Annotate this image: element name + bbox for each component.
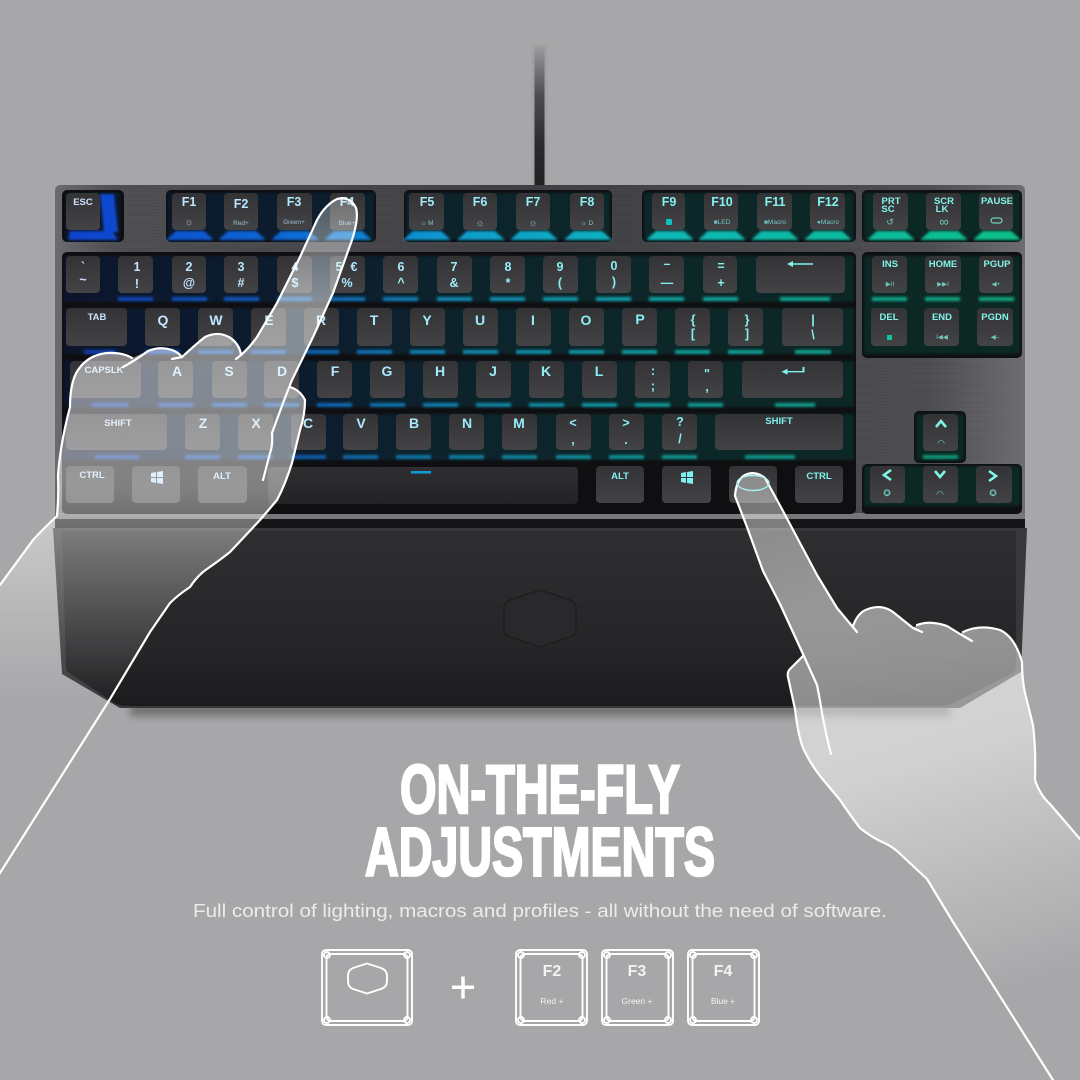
shift key row: . <box>624 433 628 447</box>
QWERTY key row: O <box>581 312 592 328</box>
function key row: SC <box>881 204 895 215</box>
QWERTY key row: ◀– <box>991 334 1000 341</box>
keycap icon: F4: Blue + <box>711 996 735 1006</box>
bottom key row: CTRL <box>79 470 105 481</box>
shift key row: SHIFT <box>765 416 793 427</box>
home key row: G <box>382 363 393 379</box>
keycap icon: F3: Green + <box>622 996 653 1006</box>
number key row: ^ <box>397 276 405 290</box>
key wells <box>62 190 1022 514</box>
QWERTY key row: PGDN <box>981 312 1009 323</box>
keycap icon: F2: Red + <box>541 996 563 1006</box>
number key row: HOME <box>929 259 957 270</box>
home key row: , <box>705 380 709 394</box>
function key row: LK <box>936 204 948 215</box>
QWERTY key row: I <box>531 312 535 328</box>
QWERTY key row: ] <box>745 327 749 341</box>
keycap icon: Cooler Master logo key <box>322 950 412 1025</box>
shift key row: B <box>409 415 419 431</box>
number key row: 3 <box>238 260 245 274</box>
number key row: 4 <box>292 260 299 274</box>
number key row: 8 <box>505 260 512 274</box>
number key row: ( <box>558 276 563 290</box>
shift key row: Z <box>199 415 208 431</box>
home key row: F <box>331 363 340 379</box>
function key row: ☼ <box>528 218 538 229</box>
shift key row: ◠ <box>937 438 945 448</box>
keycap icon: F3: F3 <box>628 963 646 980</box>
keyboard cable <box>532 45 547 187</box>
number key row: 6 <box>398 260 405 274</box>
number key row: ~ <box>79 273 87 287</box>
wrist rest <box>53 528 1027 716</box>
keycap icon: F3 <box>602 950 673 1025</box>
function key row: F6 <box>473 195 487 209</box>
number key row: = <box>717 259 725 273</box>
shift key row: , <box>571 433 575 447</box>
shift key row: M <box>513 415 525 431</box>
keycap icon: F4: F4 <box>714 963 732 980</box>
function key row: SCR <box>934 196 954 207</box>
function key row: ■LED <box>714 219 731 226</box>
number key row: 7 <box>451 260 458 274</box>
right hand outline <box>735 473 1080 1080</box>
number key row: ) <box>612 275 616 289</box>
function key row: ESC <box>73 197 93 208</box>
QWERTY key row: U <box>475 312 485 328</box>
function key row: ●Macro <box>817 219 839 226</box>
title: ADJUSTMENTS <box>365 814 715 890</box>
number key row: * <box>506 276 511 290</box>
number key row: 9 <box>557 260 564 274</box>
keycap icon: F2 <box>516 950 587 1025</box>
number key row: ◀+ <box>992 281 1001 288</box>
function key row: F8 <box>580 195 594 209</box>
home key row: J <box>489 363 497 379</box>
home key row: " <box>704 367 710 381</box>
subtitle: Full control of lighting, macros and profiles - all without the need of software. <box>193 900 887 921</box>
number key row: — <box>661 276 674 290</box>
QWERTY key row: I◀◀ <box>936 334 949 341</box>
QWERTY key row: END <box>932 312 952 323</box>
function key row: F2 <box>234 197 248 211</box>
home key row: A <box>172 363 182 379</box>
number key row: @ <box>183 276 195 290</box>
keycap icon: F2: F2 <box>543 963 561 980</box>
QWERTY key row: Y <box>422 312 432 328</box>
number key row: ` <box>81 260 85 274</box>
bottom key row: ALT <box>213 471 231 482</box>
bottom key row: ✪ <box>989 488 997 498</box>
function key row: Red+ <box>233 220 249 227</box>
bottom key row: ◠ <box>936 489 944 499</box>
keycap icon: F4 <box>688 950 759 1025</box>
function key row: Blue+ <box>339 220 356 227</box>
function key row: PRT <box>882 196 901 207</box>
bottom key row: ✪ <box>883 488 891 498</box>
plus sign <box>452 976 474 998</box>
number key row: PGUP <box>984 259 1011 270</box>
function key row: ■Macro <box>764 219 786 226</box>
home key row: K <box>541 363 551 379</box>
right hand translucent fill <box>735 473 1080 1080</box>
number key row: ! <box>135 277 139 291</box>
shift key row: N <box>462 415 472 431</box>
home key row: S <box>224 363 234 379</box>
shift key row: X <box>251 415 261 431</box>
QWERTY key row: [ <box>691 327 696 341</box>
shift key row: > <box>622 416 630 430</box>
number key row: ▶▶I <box>937 281 949 288</box>
number key row: 1 <box>134 260 141 274</box>
bottom key row <box>66 466 1012 504</box>
number key row: & <box>449 276 459 290</box>
QWERTY key row: Q <box>158 312 169 328</box>
number key row <box>66 256 1013 293</box>
home key row: : <box>651 364 655 378</box>
function key row: F3 <box>287 195 301 209</box>
shift key row: / <box>678 432 682 446</box>
shift key row: SHIFT <box>104 418 132 429</box>
QWERTY key row: DEL <box>880 312 899 323</box>
left hand outline <box>0 198 357 873</box>
number key row: 5 <box>336 260 343 274</box>
number key row: # <box>238 276 245 290</box>
function key row: F10 <box>711 195 733 209</box>
fingertip press highlight <box>737 476 769 490</box>
QWERTY key row: R <box>316 312 326 328</box>
function key row: F5 <box>420 195 434 209</box>
number key row: ▶II <box>886 281 894 288</box>
QWERTY key row: P <box>635 311 645 327</box>
title: ON-THE-FLY <box>400 751 680 828</box>
QWERTY key row: | <box>811 313 815 327</box>
number key row: € <box>351 260 358 274</box>
QWERTY key row: \ <box>811 328 815 342</box>
home key row: D <box>277 363 287 379</box>
function key row: F7 <box>526 195 540 209</box>
function key row: ↺ <box>886 217 894 227</box>
function key row: ☼ <box>475 218 485 229</box>
function key row: F4 <box>340 195 354 209</box>
key backlight glow <box>64 193 1021 506</box>
function key row: F1 <box>182 195 196 209</box>
function key row: ∞ <box>939 214 949 229</box>
function key row: ☼ M <box>420 220 434 227</box>
number key row: 2 <box>186 260 193 274</box>
logo emboss on wrist rest <box>504 590 576 647</box>
bottom key row: ALT <box>611 471 629 482</box>
function key row: PAUSE <box>981 196 1013 207</box>
number key row: + <box>717 276 725 290</box>
shift key row: < <box>569 416 577 430</box>
home key row: H <box>435 363 445 379</box>
bottom key row: CTRL <box>806 471 832 482</box>
keyboard body <box>55 185 1025 528</box>
function key row: ☼ D <box>581 220 594 227</box>
shift key row: V <box>356 415 366 431</box>
function key row <box>66 193 1013 230</box>
function key row: Green+ <box>283 219 305 226</box>
shift key row <box>66 414 958 451</box>
home key row: ; <box>651 379 655 393</box>
function key row: ☼ <box>184 217 194 228</box>
QWERTY key row: { <box>691 313 696 327</box>
QWERTY key row: E <box>264 312 274 328</box>
number key row: % <box>341 276 353 290</box>
home key row: L <box>595 363 604 379</box>
QWERTY key row: W <box>209 312 223 328</box>
function key row: F12 <box>817 195 839 209</box>
left hand translucent fill <box>0 198 357 873</box>
number key row: INS <box>882 259 898 270</box>
function key row: F11 <box>765 195 785 209</box>
QWERTY key row: TAB <box>88 312 107 323</box>
QWERTY key row: } <box>745 313 750 327</box>
home key row <box>70 361 843 398</box>
number key row: $ <box>292 276 299 290</box>
shift key row: C <box>303 415 313 431</box>
number key row: – <box>664 257 671 271</box>
number key row: 0 <box>611 259 618 273</box>
QWERTY key row: T <box>370 312 379 328</box>
QWERTY key row <box>66 308 1013 346</box>
function key row: F9 <box>662 195 676 209</box>
shift key row: ? <box>676 415 684 429</box>
home key row: CAPSLK <box>84 365 124 376</box>
title <box>365 751 715 890</box>
